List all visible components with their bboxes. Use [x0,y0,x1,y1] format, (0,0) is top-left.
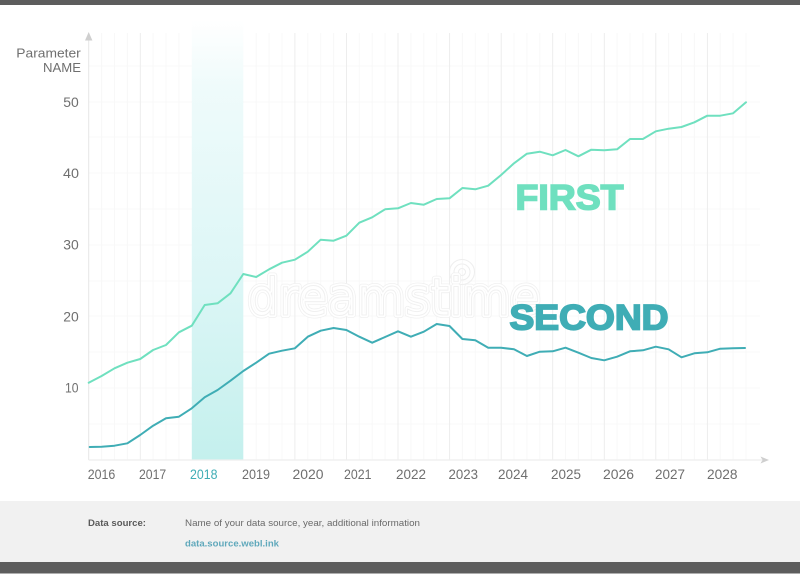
line series: second [90,324,745,447]
y axis labels: 10 [65,380,78,395]
bottom bar [0,562,800,574]
y axis with arrow [85,32,92,460]
x axis year labels: 2017 [139,467,166,482]
x axis year labels: 2016 [88,467,115,482]
x axis year labels: 2027 [655,467,685,482]
y axis labels [63,95,79,395]
x axis year labels: 2023 [448,467,478,482]
x axis year labels: 2026 [603,467,634,482]
x axis year labels: 2022 [396,467,426,482]
data source link: data.source.webl.ink [185,538,280,550]
top bar [0,0,800,5]
series label: FIRST: FIRST [516,178,624,218]
x axis year labels: 2020 [292,467,324,482]
line series: first [89,102,746,383]
x axis year labels: 2025 [551,467,581,482]
highlighted year label: 2018 [190,467,218,482]
watermark: dreamstime [248,268,540,328]
series label: SECOND: SECOND [510,298,668,338]
watermark: dreamstime [248,268,540,328]
x axis year labels: 2019 [242,467,270,482]
y axis labels: 20 [63,310,79,325]
y axis labels: 40 [63,166,79,181]
x axis with arrow [89,456,769,464]
data source description: Name of your data source, year, additional information [185,518,420,529]
footer panel [0,501,800,562]
y axis labels: 50 [63,95,79,110]
x axis year labels: 2021 [344,467,372,482]
x axis year labels [88,467,737,482]
y axis title: NAME [43,60,81,75]
highlighted year band: 2018 [192,20,243,460]
x axis year labels: 2028 [707,467,738,482]
y axis title [16,46,81,75]
y axis title: Parameter [16,46,81,60]
watermark: dreamstime [248,268,540,328]
chart grid [89,33,760,460]
data source label: Data source: [88,518,146,529]
x axis year labels: 2024 [498,467,528,482]
y axis labels: 30 [63,238,79,253]
